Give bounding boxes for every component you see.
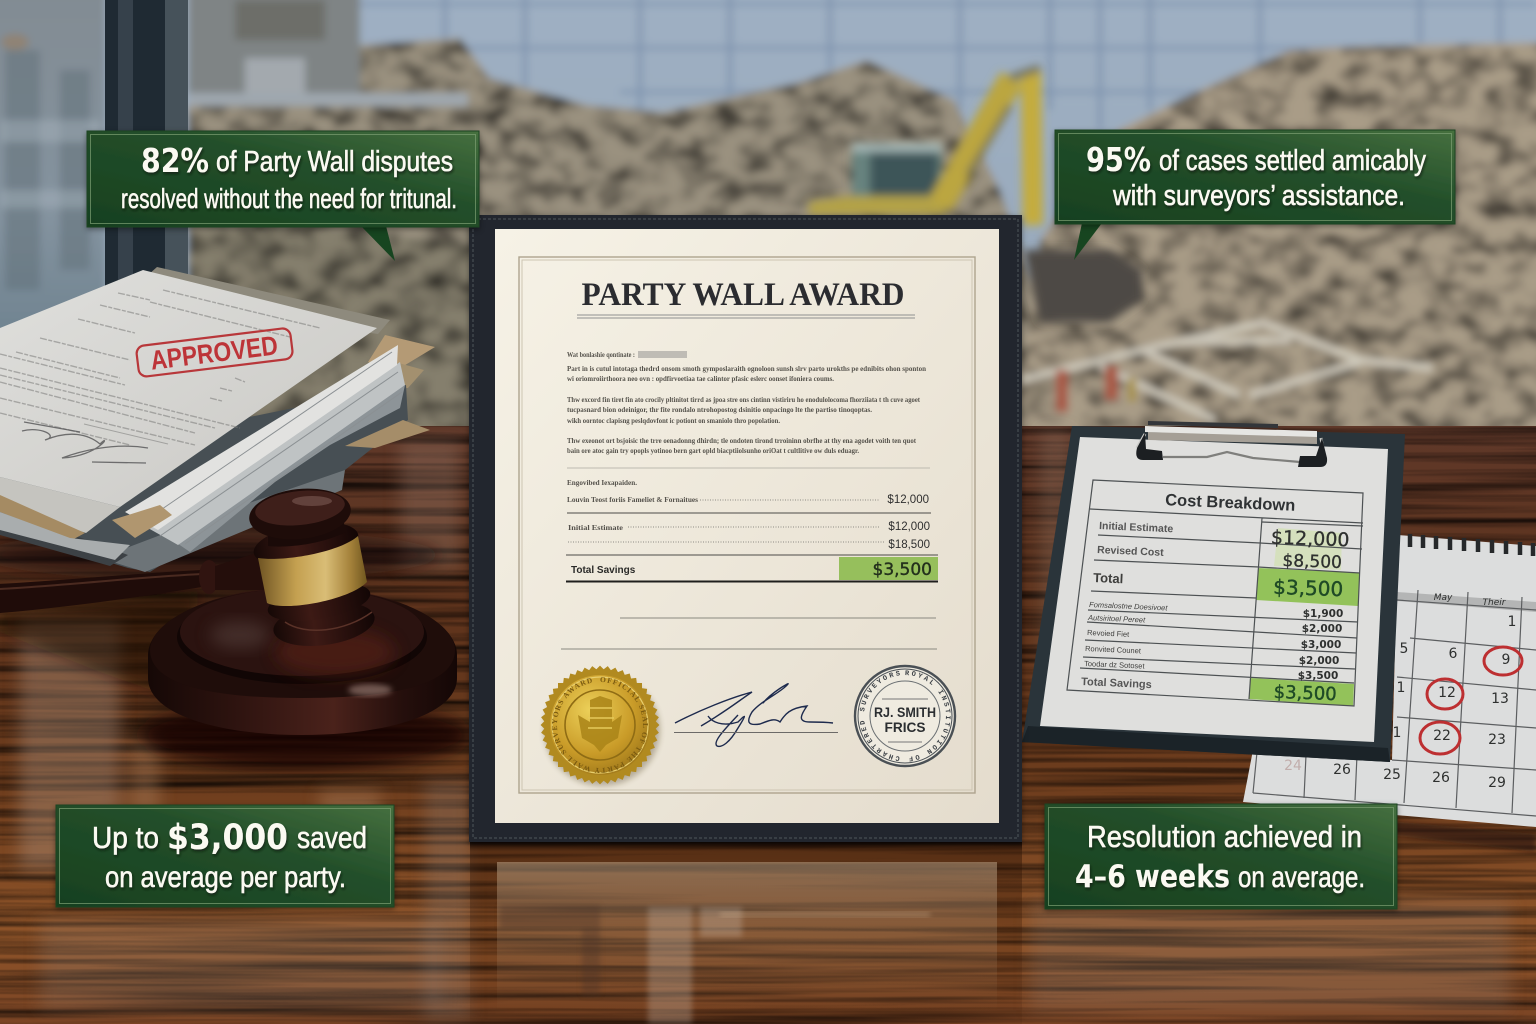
certificate body text (567, 350, 926, 455)
cost breakdown table: Fomsalostne Doesivoet (1089, 600, 1169, 612)
callout: 95% settled amicably (1055, 130, 1455, 260)
certificate body text: Wat bonlashie qontinate : (567, 350, 635, 359)
calendar dates: 13 (1491, 691, 1509, 707)
gavel handle (0, 570, 202, 613)
calendar dates: May (1434, 593, 1453, 603)
callout: 82% disputes resolved: of Party Wall disputes (216, 146, 453, 178)
callout: 4-6 weeks resolution: Resolution achieved in (1087, 819, 1362, 854)
gold seal: OFFICIAL SEAL OF THE PARTY WALL SURVEYORS AWARD (552, 677, 648, 773)
certificate body text: Thw exeonot ort bsjoisic the trre oenadonng dhirdn; tle ondoten tirond trroininn obrfhe at thy ena agodet voith ten quot (567, 436, 916, 445)
cost breakdown table: $2,000 (1302, 623, 1342, 635)
certificate figures: Initial Estimate (568, 523, 624, 532)
red date circles (1420, 647, 1522, 754)
calendar dates: 12 (1438, 685, 1456, 701)
certificate body text: bain ore atoc gain try opopls yotinoo bern gart opld biacptiiolsunho oriOat t cultlitive ow duls eduagr. (567, 446, 859, 455)
certificate body text: Part in is cutul intotaga thedrd onsom smoth gymposlaraith ognoloon sunsh slrv parto urokths pe ednibits ohon sponton (567, 364, 926, 373)
cost breakdown table: Ronvited Counet (1085, 644, 1142, 655)
certificate figures: $18,500 (888, 539, 930, 551)
calendar dates: 5 (1400, 641, 1408, 657)
surveyor stamp: FRICS (884, 719, 926, 735)
certificate body text: tucpasnard bion odeinigor, thr fite rondalo ntrohopostog dsinitio onpacingo lte the partiso tinoqoptas. (567, 405, 872, 414)
callout: $3,000 saved: saved (297, 820, 367, 855)
clipboard cost breakdown (1022, 421, 1405, 762)
calendar dates: 9 (1502, 652, 1510, 668)
cost breakdown table: Revised Cost (1097, 544, 1164, 559)
gavel head (247, 484, 377, 652)
cost breakdown table: $8,500 (1282, 551, 1342, 573)
cost breakdown table: Total (1093, 570, 1124, 586)
certificate body text: wikh oorntoc clapisng peslqdovfont ic potiont on smaniolo thro popolation. (567, 416, 780, 425)
calendar dates: Their (1483, 598, 1507, 608)
certificate figures: $3,500 (873, 560, 932, 580)
cost breakdown table: Toodar dz Sotoset (1084, 659, 1146, 671)
callout: 82% disputes resolved: resolved without the need for tritunal. (121, 183, 457, 214)
certificate frame (466, 214, 1026, 846)
callout: 95% settled amicably: with surveyors’ assistance. (1112, 180, 1405, 212)
gold seal (540, 666, 663, 789)
certificate figures: Total Savings (571, 565, 636, 576)
callout: 82% disputes resolved: 82% (141, 141, 209, 180)
excavator (809, 68, 1142, 322)
certificate body text: wi oriomroiirthoora neo ovn : opdfirvoetiaa tae calintor pfasic eslerc oonset ifoniera coums. (567, 374, 834, 383)
calendar dates: 1 (1508, 614, 1516, 630)
calendar dates: 24 (1284, 758, 1302, 774)
certificate figures: $12,000 (887, 494, 929, 506)
cost breakdown table: $3,000 (1301, 639, 1341, 651)
callout: $3,000 saved (56, 805, 394, 907)
cost breakdown table: Total Savings (1081, 676, 1152, 691)
cost breakdown table: $3,500 (1273, 575, 1344, 601)
callout: 4-6 weeks resolution: 4–6 weeks (1075, 859, 1230, 895)
calendar dates: 1 (1393, 725, 1401, 741)
callout: 95% settled amicably: 95% (1086, 140, 1151, 179)
certificate figures: Louvin Teost foriis Fameliet & Fornaitues (567, 495, 698, 504)
cost breakdown table: Autsiritoel Pereet (1087, 613, 1146, 625)
surveyor stamp: RJ. SMITH (874, 704, 936, 720)
certificate body text: Thw excord fin tiret fin ato crocily pltinitot tirrd as jpoa stre ons cintinn vistiriru ho enodulolocoma fhorziiata t th cuve agoet (567, 395, 920, 404)
certificate figures: Engovibed Iexapaiden. (567, 478, 637, 487)
cost breakdown table: $12,000 (1271, 527, 1350, 551)
signature on sheet (22, 422, 148, 463)
cost breakdown table: $2,000 (1299, 655, 1339, 667)
cost breakdown table: $3,500 (1273, 682, 1337, 705)
callout: $3,000 saved: Up to (92, 820, 159, 855)
approved stamp: APPROVED (149, 330, 279, 376)
cost breakdown table (1067, 480, 1363, 706)
calendar dates: 25 (1383, 767, 1401, 783)
calendar dates: 22 (1433, 728, 1451, 744)
callout: 4-6 weeks resolution: on average. (1238, 861, 1365, 894)
calendar dates: 23 (1488, 732, 1506, 748)
certificate figures: $12,000 (888, 521, 930, 533)
calendar dates: 1 (1397, 680, 1405, 696)
callout: 82% disputes resolved (87, 131, 479, 261)
certificate title: PARTY WALL AWARD (582, 277, 904, 313)
calendar dates: 26 (1333, 762, 1351, 778)
callout: $3,000 saved: $3,000 (167, 818, 288, 858)
calendar dates: 6 (1449, 646, 1458, 662)
cost breakdown table: $1,900 (1303, 608, 1343, 620)
certificate figures (561, 478, 938, 649)
cost breakdown table: $3,500 (1298, 670, 1338, 682)
calendar spiral binding (1410, 534, 1533, 556)
calendar dates (1284, 593, 1516, 791)
callout: $3,000 saved: on average per party. (105, 861, 346, 894)
stack of documents (0, 267, 440, 581)
cost breakdown table: Initial Estimate (1099, 520, 1174, 535)
wooden desk (0, 426, 1536, 1024)
approved document sheet (0, 270, 377, 507)
cost breakdown table: Cost Breakdown (1165, 491, 1296, 515)
gavel and sound block (0, 484, 470, 769)
scaffold (1021, 323, 1432, 420)
callout: 4-6 weeks resolution (1045, 804, 1397, 909)
calendar (1243, 534, 1536, 852)
cost breakdown table: Revoied Fiet (1087, 628, 1130, 639)
surveyor stamp: ROYAL INSTITUTION OF CHARTERED SURVEYORS (860, 670, 951, 762)
calendar dates: 29 (1488, 775, 1506, 791)
desk reflections (20, 430, 1510, 1020)
clipboard clip (1136, 421, 1327, 467)
signature (674, 684, 838, 746)
background: construction site through window (0, 0, 1536, 450)
callout: 95% settled amicably: of cases settled amicably (1159, 145, 1426, 177)
calendar dates: 26 (1432, 770, 1450, 786)
